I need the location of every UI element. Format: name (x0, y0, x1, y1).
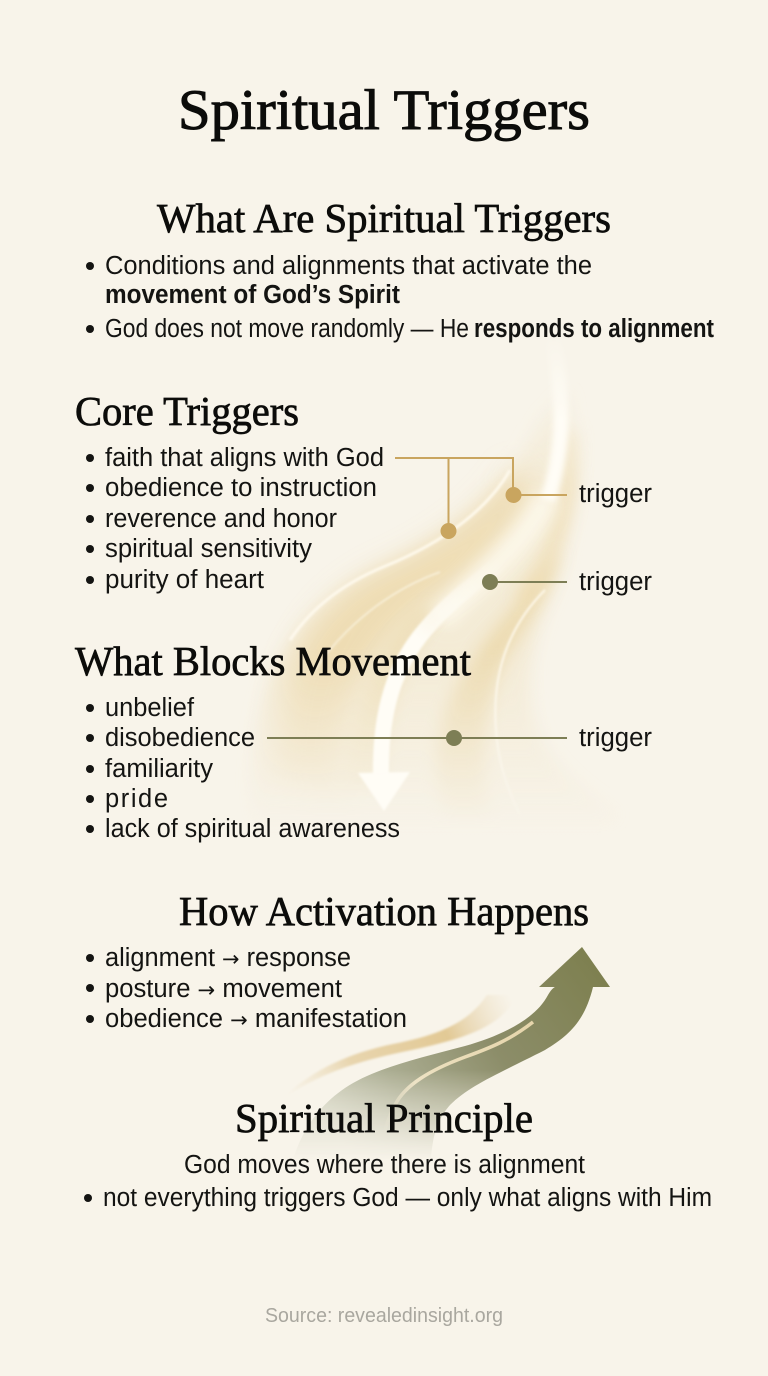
statement: God moves where there is alignment (184, 1151, 585, 1179)
list item: lack of spiritual awareness (105, 815, 400, 843)
bullet text: God does not move randomly — He (105, 315, 469, 343)
section: what blocks movement (75, 638, 472, 843)
list item: alignment → response (105, 944, 351, 972)
section: how activation happens (86, 888, 589, 1033)
heading: How Activation Happens (179, 888, 589, 934)
section: spiritual principle (84, 1095, 712, 1212)
list item: posture → movement (105, 975, 342, 1003)
title: Spiritual Triggers (178, 79, 590, 142)
bullet text bold: movement of God’s Spirit (105, 281, 400, 309)
label: trigger: trigger (579, 480, 653, 508)
list item: obedience to instruction (105, 474, 377, 502)
list item: obedience → manifestation (105, 1005, 407, 1033)
list item: pride (105, 785, 168, 813)
section: core triggers (75, 388, 384, 594)
bullet text: Conditions and alignments that activate the (105, 252, 592, 280)
label: trigger: trigger (579, 568, 653, 596)
connector: olive node (482, 574, 567, 590)
heading: Core Triggers (75, 388, 299, 434)
illustration: rising olive arrow (299, 947, 610, 1151)
bullet text bold: responds to alignment (474, 315, 714, 343)
connector: gold bracket to two nodes (395, 458, 567, 539)
list item: faith that aligns with God (105, 444, 384, 472)
list item: familiarity (105, 755, 213, 783)
list item: unbelief (105, 694, 195, 722)
heading: Spiritual Principle (235, 1095, 533, 1141)
bullet text: not everything triggers God — only what aligns with Him (103, 1184, 712, 1212)
connector: olive line with node (267, 730, 567, 746)
section: what are spiritual triggers (86, 195, 714, 343)
list item: spiritual sensitivity (105, 535, 312, 563)
heading: What Are Spiritual Triggers (157, 195, 611, 241)
list item: reverence and honor (105, 505, 338, 533)
illustration: descending flow of light (256, 402, 584, 808)
list item: disobedience (105, 724, 255, 752)
list item: purity of heart (105, 566, 264, 594)
label: trigger: trigger (579, 724, 653, 752)
heading: What Blocks Movement (75, 638, 472, 684)
source line: Source: revealedinsight.org (265, 1305, 503, 1327)
